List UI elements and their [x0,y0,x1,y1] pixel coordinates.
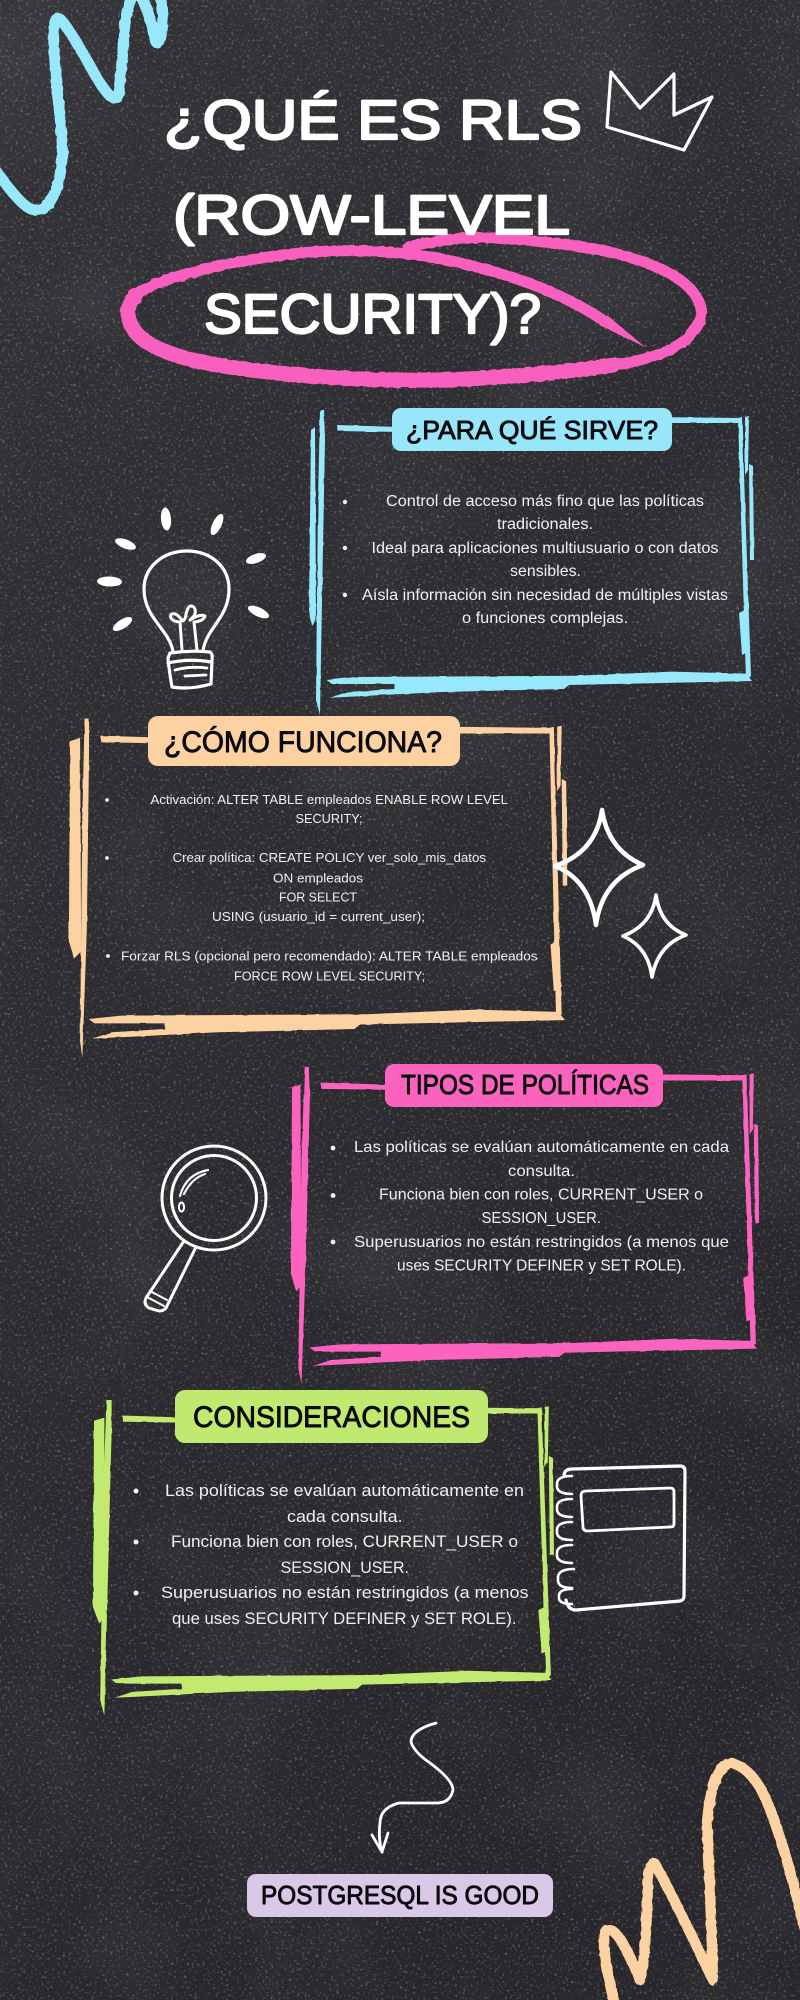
body text: que uses SECURITY DEFINER y SET ROLE). [172,1609,516,1628]
icon: magnifying glass [145,1146,266,1311]
heading pill: ¿CÓMO FUNCIONA? [164,726,442,759]
title line 1: ¿QUÉ ES RLS [164,88,582,151]
body text [343,493,728,627]
body text: Ideal para aplicaciones multiusuario o con datos [372,540,719,557]
title line 3: SECURITY)? [204,282,541,345]
footer pill: POSTGRESQL IS GOOD [261,1880,539,1910]
heading pill [392,408,672,451]
panel: cómo funciona [69,716,567,1058]
heading pill: ¿PARA QUÉ SIRVE? [406,415,658,445]
body text: SECURITY; [296,811,362,826]
icon: light bulb [97,507,271,688]
frame: cyan [309,410,754,715]
panel: para qué sirve [309,408,754,715]
body text: Control de acceso más fino que las políticas [386,493,704,510]
heading pill [175,1390,488,1443]
title line 2: (ROW-LEVEL [173,183,570,246]
panel: tipos de políticas [291,1064,759,1384]
body text: cada consulta. [287,1507,403,1526]
frame: green [93,1400,554,1716]
icon: crown [607,72,712,150]
highlight ellipse [128,237,701,380]
body text: Las políticas se evalúan automáticamente en [165,1481,524,1500]
body text: Crear política: CREATE POLICY ver_solo_mis_datos [172,850,487,865]
panel: consideraciones [93,1390,554,1716]
body text: Funciona bien con roles, CURRENT_USER o [379,1186,703,1204]
scribble: cyan top-left [0,0,163,210]
body text: uses SECURITY DEFINER y SET ROLE). [397,1258,686,1274]
heading pill [385,1064,663,1107]
scribble: peach bottom-right [604,1763,800,2000]
frame: pink [291,1067,759,1384]
body text [331,1139,729,1274]
body text: ON empleados [273,870,364,886]
body text: tradicionales. [497,516,593,533]
body text: consulta. [508,1163,575,1180]
body text: Activación: ALTER TABLE empleados ENABLE ROW LEVEL [150,792,508,807]
heading pill: CONSIDERACIONES [193,1401,470,1434]
body text: FORCE ROW LEVEL SECURITY; [234,968,425,984]
frame: peach [69,719,567,1058]
body text: Las políticas se evalúan automáticamente en cada [354,1139,729,1156]
body text [134,1481,528,1628]
body text: FOR SELECT [279,890,357,904]
body text: Superusuarios no están restringidos (a menos que [354,1234,729,1251]
body text [105,792,538,984]
icon: sparkles [555,810,686,977]
body text: sensibles. [510,563,581,580]
body text: Aísla información sin necesidad de múltiples vistas [362,587,728,604]
body text: SESSION_USER. [281,1558,409,1577]
footer pill [247,1874,553,1917]
body text: USING (usuario_id = current_user); [212,909,425,924]
body text: o funciones complejas. [462,610,628,627]
heading pill: TIPOS DE POLÍTICAS [401,1069,649,1100]
body text: Funciona bien con roles, CURRENT_USER o [171,1532,518,1551]
heading pill [148,716,460,766]
body text: SESSION_USER. [482,1210,601,1227]
arrow: wavy pointing down [372,1723,453,1852]
body text: Forzar RLS (opcional pero recomendado): ALTER TABLE empleados [121,948,538,964]
icon: notebook [557,1466,685,1610]
body text: Superusuarios no están restringidos (a menos [161,1583,528,1602]
title [128,88,701,380]
